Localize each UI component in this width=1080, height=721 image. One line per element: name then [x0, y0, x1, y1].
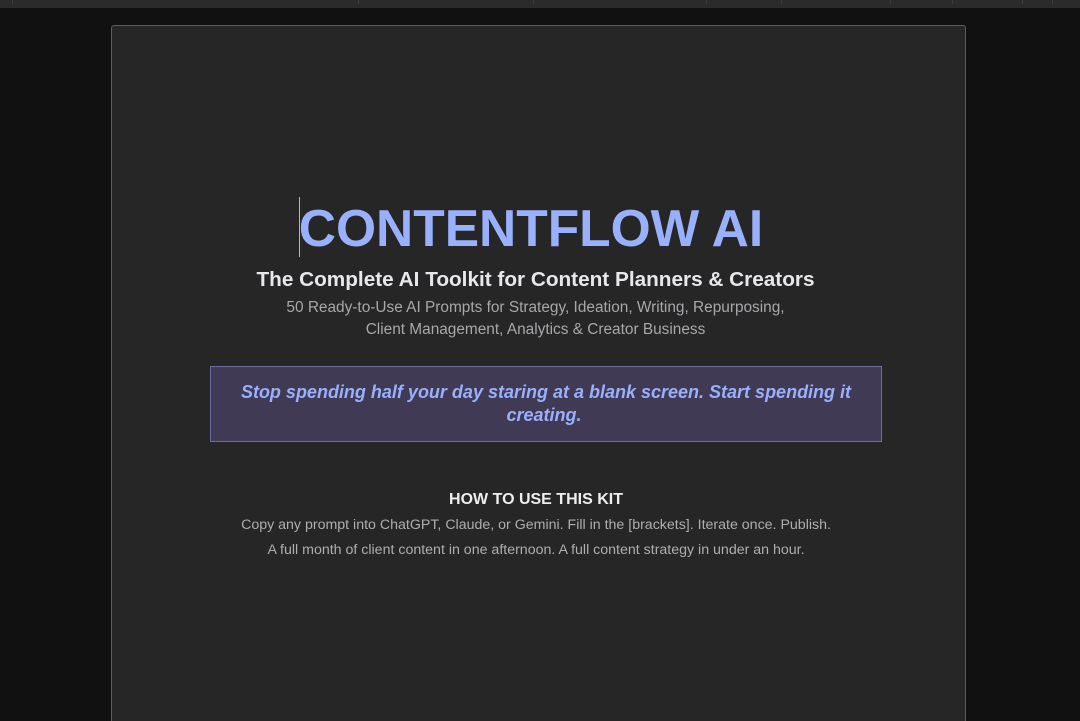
how to use text — [241, 517, 831, 558]
description: 50 Ready-to-Use AI Prompts for Strategy, Ideation, Writing, Repurposing, — [286, 299, 785, 316]
subtitle: The Complete AI Toolkit for Content Planners & Creators — [256, 268, 815, 291]
document page panel — [111, 25, 966, 721]
text cursor — [299, 197, 300, 257]
top toolbar strip — [0, 0, 1080, 8]
how to use text: A full month of client content in one afternoon. A full content strategy in under an hour. — [267, 542, 805, 558]
callout: creating. — [506, 405, 582, 425]
callout — [210, 366, 882, 442]
callout: Stop spending half your day staring at a blank screen. Start spending it — [241, 382, 851, 402]
how to use heading: HOW TO USE THIS KIT — [449, 491, 623, 508]
description — [286, 299, 785, 338]
title: CONTENTFLOW AI — [299, 199, 763, 257]
how to use text: Copy any prompt into ChatGPT, Claude, or Gemini. Fill in the [brackets]. Iterate once. Publish. — [241, 517, 831, 533]
description: Client Management, Analytics & Creator Business — [366, 320, 705, 338]
